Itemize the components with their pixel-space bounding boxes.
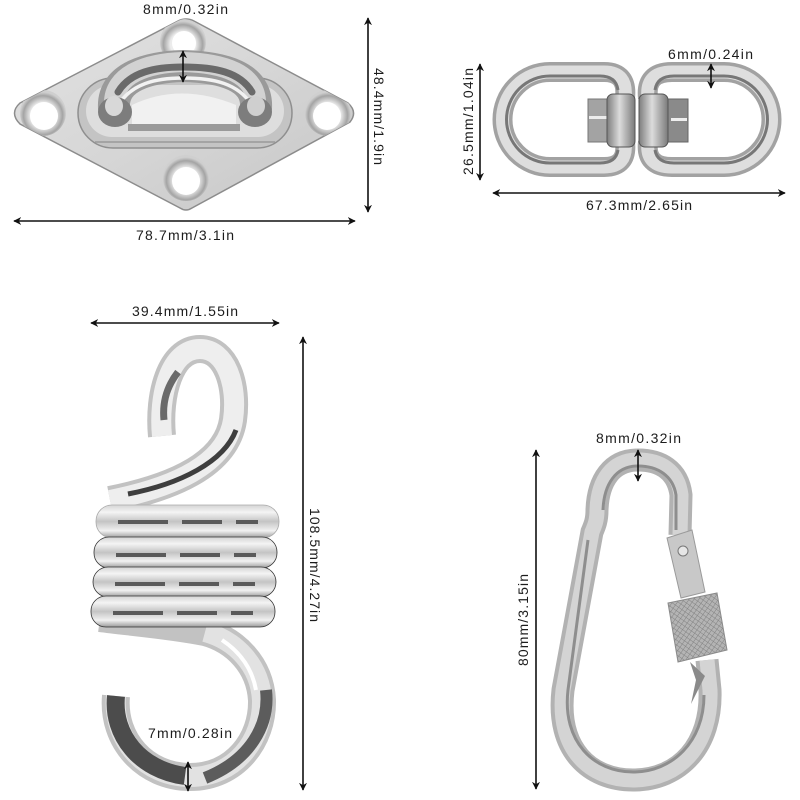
label: swivel height: 26.5mm/1.04in (460, 68, 476, 175)
gate pin (678, 546, 688, 556)
arrow: swivel width (493, 192, 785, 194)
plate body (14, 19, 354, 210)
left staple foot (98, 96, 132, 127)
spring hook (91, 349, 279, 778)
bottom hook (100, 618, 266, 778)
spring coil 2 (94, 537, 277, 568)
swivel connector (503, 72, 772, 167)
arrow: plate height (367, 18, 369, 212)
top hook (110, 349, 236, 500)
spring coil 4 (91, 596, 275, 627)
arrow: swivel ring thickness (710, 64, 712, 88)
arrow: spring wire thickness (187, 762, 189, 791)
right mounting hole (305, 90, 351, 136)
gate tip (690, 662, 705, 704)
label: plate height: 48.4mm/1.9in (371, 68, 387, 165)
label: spring width: 39.4mm/1.55in (132, 303, 238, 319)
spring coil 3 (93, 567, 276, 597)
label: carabiner wire thickness: 8mm/0.32in (596, 430, 681, 446)
carabiner body (562, 460, 710, 780)
label: swivel width: 67.3mm/2.65in (586, 197, 692, 213)
left ring (503, 72, 625, 167)
arrow: spring height (302, 337, 304, 790)
label: plate eye size: 8mm/0.32in (143, 1, 228, 17)
knurled sleeve (668, 593, 727, 662)
arrow: spring width (91, 322, 279, 324)
right staple foot (238, 96, 272, 127)
carabiner (562, 460, 727, 780)
label: spring height: 108.5mm/4.27in (307, 508, 323, 622)
left mounting hole (20, 90, 66, 136)
label: spring wire thickness: 7mm/0.28in (148, 725, 232, 741)
arrow: carabiner wire thickness (637, 450, 639, 481)
staple loop (114, 62, 256, 108)
arrow: swivel height (479, 64, 481, 180)
gate (667, 530, 705, 598)
right barrel (639, 94, 668, 147)
diamond pad eye plate (14, 19, 354, 210)
bottom mounting hole (163, 155, 209, 201)
label: plate width: 78.7mm/3.1in (136, 227, 234, 243)
left barrel (607, 94, 635, 147)
arrow: carabiner height (535, 450, 537, 789)
spring coil 1 (96, 505, 279, 538)
top mounting hole (160, 19, 206, 52)
arrow: plate width (14, 220, 355, 222)
oval recess (78, 78, 292, 148)
label: swivel ring thickness: 6mm/0.24in (668, 46, 753, 62)
right nut (667, 99, 688, 142)
right ring (648, 72, 772, 167)
label: carabiner height: 80mm/3.15in (515, 574, 531, 666)
left nut (588, 99, 609, 142)
arrow: eye thickness (182, 51, 184, 82)
